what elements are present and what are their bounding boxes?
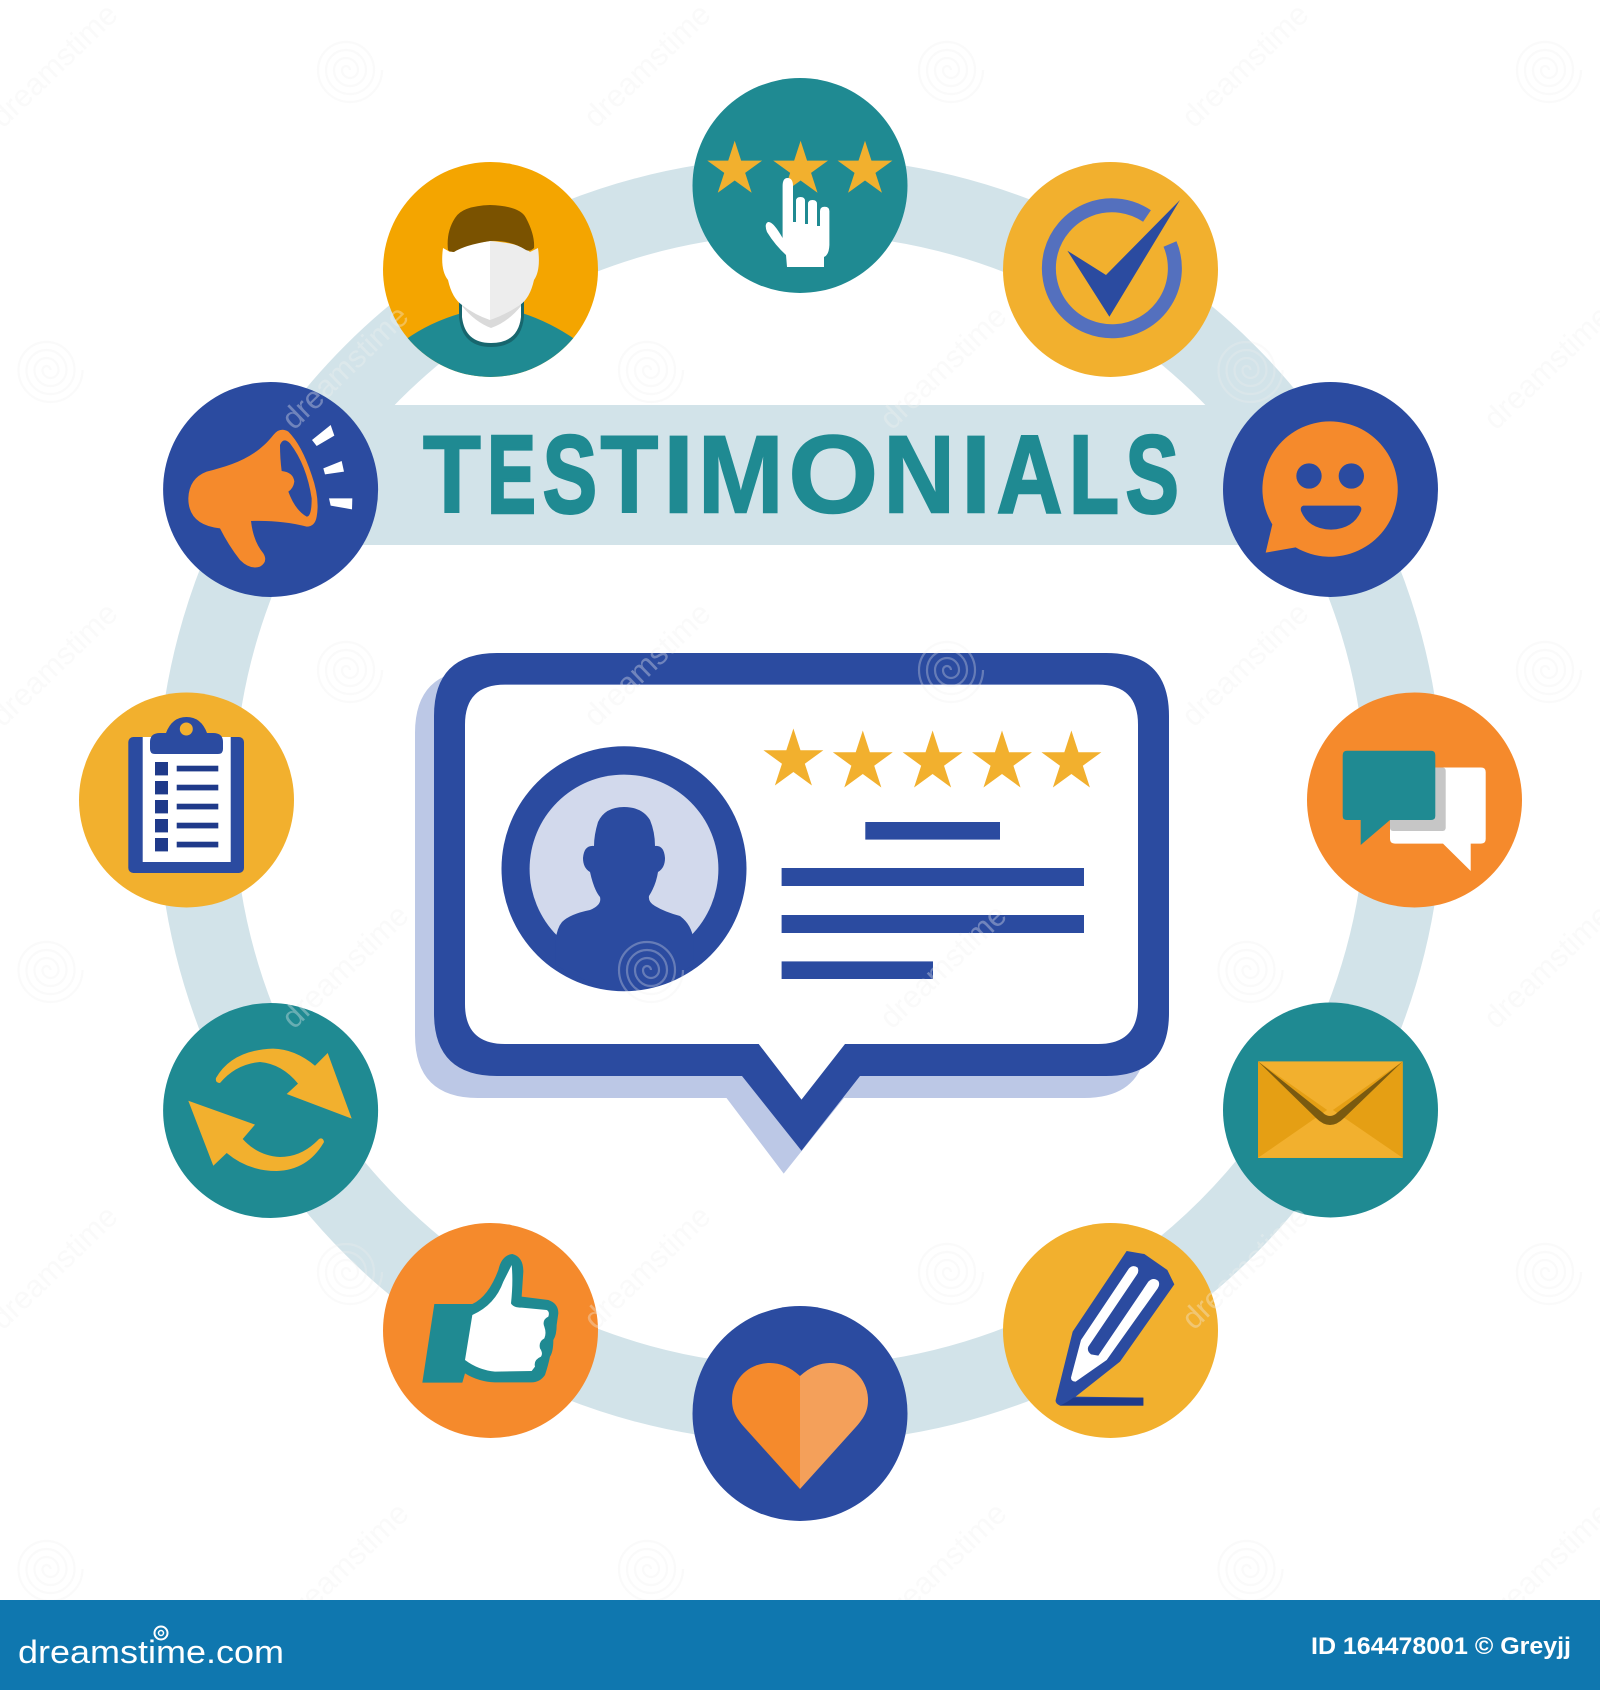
title: O: [788, 414, 878, 536]
title: L: [1070, 414, 1119, 536]
title: S: [1126, 414, 1179, 536]
watermark text: dreamstime: [873, 298, 1013, 436]
title: S: [543, 414, 597, 536]
watermark text: dreamstime: [275, 298, 415, 436]
icon: megaphone: [163, 382, 378, 597]
title: I: [961, 414, 991, 536]
watermark text: dreamstime: [873, 897, 1013, 1035]
watermark text: dreamstime: [1175, 595, 1315, 733]
watermark text: dreamstime: [577, 0, 717, 134]
icon: speech bubbles: [1307, 692, 1522, 908]
title banner: [300, 405, 1300, 545]
bubble shadow: [415, 670, 1147, 1174]
icon: clipboard checklist: [79, 692, 294, 908]
five star rating: [763, 728, 1101, 787]
portrait: [502, 746, 746, 991]
title: M: [698, 414, 784, 536]
title: A: [997, 414, 1062, 536]
watermark text: dreamstime: [873, 1495, 1013, 1633]
title: T: [423, 414, 481, 536]
icon: heart: [692, 1306, 908, 1521]
icon: envelope: [1223, 1002, 1438, 1218]
footer bar: [0, 1600, 1600, 1690]
title: N: [883, 414, 955, 536]
title: E: [487, 414, 536, 536]
footer logo: dreamstime.com: [18, 1634, 284, 1670]
bubble interior: [465, 685, 1138, 1100]
review text lines: [782, 822, 1084, 979]
watermark text: dreamstime: [577, 1198, 717, 1336]
icon: person avatar: [383, 162, 598, 390]
watermark text: dreamstime: [1175, 1198, 1315, 1336]
title: T: [600, 414, 658, 536]
icon: thumbs up: [383, 1223, 598, 1438]
icon: star rating with pointing hand: [692, 78, 908, 293]
icon: check mark badge: [1003, 162, 1218, 377]
central review speech bubble: [415, 653, 1169, 1174]
watermark text: dreamstime: [1175, 0, 1315, 134]
ring connecting icons: [196, 196, 1404, 1404]
title: I: [663, 414, 694, 536]
icon: smiling chat bubble: [1223, 382, 1438, 597]
icon: pencil: [1003, 1223, 1218, 1438]
footer credit: ID 164478001 © Greyjj: [1311, 1633, 1571, 1660]
bubble outline: [434, 653, 1169, 1151]
watermark text: dreamstime: [275, 1495, 415, 1633]
watermark text: dreamstime: [275, 897, 415, 1035]
watermark text: dreamstime: [577, 595, 717, 733]
icon: refresh arrows: [163, 1003, 378, 1218]
